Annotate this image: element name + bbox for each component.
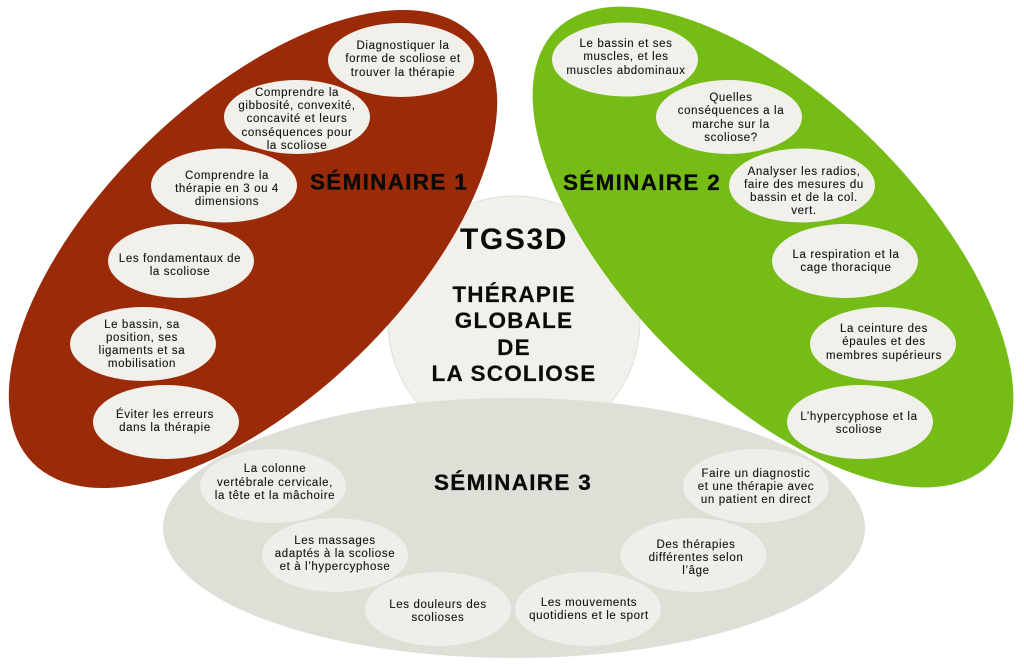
topic: radios: vert.	[791, 205, 817, 217]
topic: douleurs: Les douleurs des	[389, 599, 487, 611]
topic: gibbosité: Comprendre la	[255, 87, 339, 99]
topic: diagnostiquer: Diagnostiquer la	[356, 40, 450, 52]
topic: fondamentaux: la scoliose	[150, 266, 210, 278]
panel: séminaire 3	[163, 398, 865, 658]
topic: ceinture: La ceinture des	[840, 323, 928, 335]
topic: radios	[729, 148, 875, 222]
panel: séminaire 1	[0, 0, 578, 570]
heading: Thérapie globale de la scoliose: LA SCOLIOSE	[432, 361, 596, 386]
topic: marche: conséquences a la	[678, 105, 784, 117]
topic: colonne cervicale	[200, 449, 346, 523]
topic: massages: adaptés à la scoliose	[275, 548, 395, 560]
heading: séminaire 3: SÉMINAIRE 3	[434, 470, 592, 495]
topic: bassin et muscles	[552, 22, 698, 96]
topic: diagnostic en direct: un patient en direct	[701, 494, 811, 506]
topic: radios: faire des mesures du	[744, 179, 864, 191]
topic: gibbosité: gibbosité, convexité,	[238, 100, 356, 112]
topic: fondamentaux: Les fondamentaux de	[119, 253, 241, 265]
topic: fondamentaux	[108, 224, 254, 298]
topic: marche	[656, 80, 802, 154]
topic: mouvements: Les mouvements	[541, 597, 637, 609]
heading: Thérapie globale de la scoliose	[432, 282, 596, 386]
topic: massages: et à l’hypercyphose	[280, 561, 390, 573]
topic: bassin: ligaments et sa	[99, 345, 185, 357]
topic: diagnostiquer: trouver la thérapie	[351, 67, 455, 79]
heading: séminaire 1: SÉMINAIRE 1	[310, 170, 468, 194]
heading: séminaire 2: SÉMINAIRE 2	[563, 170, 721, 195]
topic: radios: bassin et de la col.	[750, 192, 858, 204]
topic: thérapies selon l'âge: Des thérapies	[656, 539, 736, 551]
title: TGS3D: TGS3D	[460, 223, 568, 256]
topic: hypercyphose: L’hypercyphose et la	[800, 411, 918, 423]
topic: bassin et muscles: Le bassin et ses	[579, 38, 673, 50]
heading: Thérapie globale de la scoliose: GLOBALE	[455, 308, 573, 333]
topic: gibbosité: concavité et leurs	[247, 113, 347, 125]
topic: thérapies selon l'âge: différentes selon	[649, 552, 743, 564]
topic: diagnostic en direct	[683, 449, 829, 523]
heading: Thérapie globale de la scoliose: THÉRAPIE	[452, 282, 576, 307]
centre text: TGS3D and subtitle	[432, 223, 596, 386]
topic: éviter les erreurs: Éviter les erreurs	[116, 408, 214, 421]
topic: marche: Quelles	[709, 92, 753, 104]
panel: séminaire 2	[453, 0, 1024, 567]
topic: marche: marche sur la	[692, 119, 770, 131]
topic: thérapie en 3 ou 4 dimensions	[151, 148, 297, 222]
topic: gibbosité: la scoliose	[267, 140, 327, 152]
topic: mouvements	[515, 572, 661, 646]
heading: Thérapie globale de la scoliose: DE	[497, 335, 531, 360]
topic: diagnostic en direct: et une thérapie avec	[698, 481, 814, 493]
topic: bassin: position, ses	[106, 332, 178, 344]
topic: mouvements: quotidiens et le sport	[529, 610, 649, 622]
topic: ceinture: membres supérieurs	[826, 350, 942, 362]
topic: thérapie en 3 ou 4 dimensions: thérapie en 3 ou 4	[175, 183, 279, 195]
topic: thérapies selon l'âge	[620, 518, 766, 592]
topic: douleurs: scolioses	[412, 612, 464, 624]
topic: gibbosité	[224, 80, 370, 154]
topic: thérapies selon l'âge: l’âge	[682, 565, 710, 577]
topic: hypercyphose	[787, 385, 933, 459]
topic: ceinture: épaules et des	[842, 336, 926, 348]
topic: ceinture	[810, 307, 956, 381]
topic: gibbosité: conséquences pour	[242, 127, 352, 139]
topic: massages: Les massages	[294, 535, 376, 547]
topic: bassin et muscles: muscles, et les	[583, 51, 669, 63]
topic: bassin	[70, 307, 216, 381]
topic: radios: Analyser les radios,	[748, 166, 860, 178]
topic: hypercyphose: scoliose	[836, 424, 882, 436]
topic: éviter les erreurs	[93, 385, 239, 459]
topic: massages	[262, 518, 408, 592]
topic: marche: scoliose?	[704, 132, 758, 144]
topic: diagnostic en direct: Faire un diagnostic	[702, 468, 810, 480]
topic: respiration	[772, 224, 918, 298]
central circle: TGS3D	[388, 196, 640, 448]
topic: colonne cervicale: la tête et la mâchoire	[215, 490, 335, 502]
topic: bassin: mobilisation	[108, 358, 176, 370]
topic: éviter les erreurs: dans la thérapie	[119, 422, 211, 434]
topic: respiration: La respiration et la	[792, 249, 900, 261]
topic: respiration: cage thoracique	[800, 262, 892, 274]
topic: diagnostiquer	[328, 23, 474, 97]
topic: colonne cervicale: vertébrale cervicale,	[217, 477, 333, 489]
topic: bassin: Le bassin, sa	[104, 319, 180, 331]
topic: bassin et muscles: muscles abdominaux	[566, 65, 686, 77]
topic: thérapie en 3 ou 4 dimensions: dimensions	[195, 196, 259, 208]
topic: colonne cervicale: La colonne	[244, 463, 306, 475]
topic: diagnostiquer: forme de scoliose et	[345, 53, 461, 65]
topic: thérapie en 3 ou 4 dimensions: Comprendre la	[185, 170, 269, 182]
topic: douleurs	[365, 572, 511, 646]
